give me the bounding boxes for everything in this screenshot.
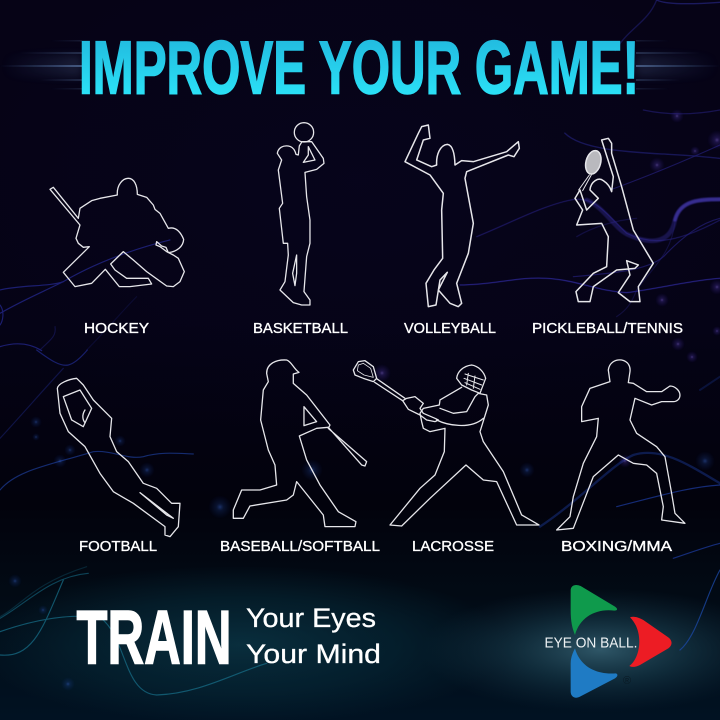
figure: football player (57, 378, 180, 537)
icon: green triangle (571, 585, 617, 635)
logo: eye on ball (544, 585, 672, 698)
label: football: FOOTBALL (79, 538, 157, 555)
slogan: your mind: Your Mind (246, 639, 381, 669)
logo wordmark: EYE ON BALL. (544, 636, 638, 652)
label: volleyball: VOLLEYBALL (404, 320, 496, 337)
label: baseball/softball: BASEBALL/SOFTBALL (220, 538, 380, 555)
figure: basketball player (277, 123, 324, 305)
slogan: train: TRAIN (76, 596, 232, 680)
background star sparkles (8, 109, 720, 691)
icon: blue triangle (571, 648, 617, 698)
label: basketball: BASKETBALL (253, 320, 348, 337)
label: pickleball/tennis: PICKLEBALL/TENNIS (532, 320, 683, 337)
icon: red triangle (629, 617, 672, 667)
label: hockey: HOCKEY (84, 320, 149, 337)
label: boxing/mma: BOXING/MMA (561, 538, 672, 555)
figure: baseball batter (233, 360, 367, 527)
figure: boxer (557, 360, 685, 530)
figure: lacrosse player (353, 361, 539, 526)
label: lacrosse: LACROSSE (412, 538, 494, 555)
figure: hockey goalie (50, 178, 184, 287)
figure: tennis player (575, 138, 653, 302)
title light streaks (0, 40, 720, 90)
slogan: your eyes: Your Eyes (246, 603, 376, 633)
registered mark: ® (623, 675, 631, 687)
figure: volleyball player (405, 125, 519, 307)
